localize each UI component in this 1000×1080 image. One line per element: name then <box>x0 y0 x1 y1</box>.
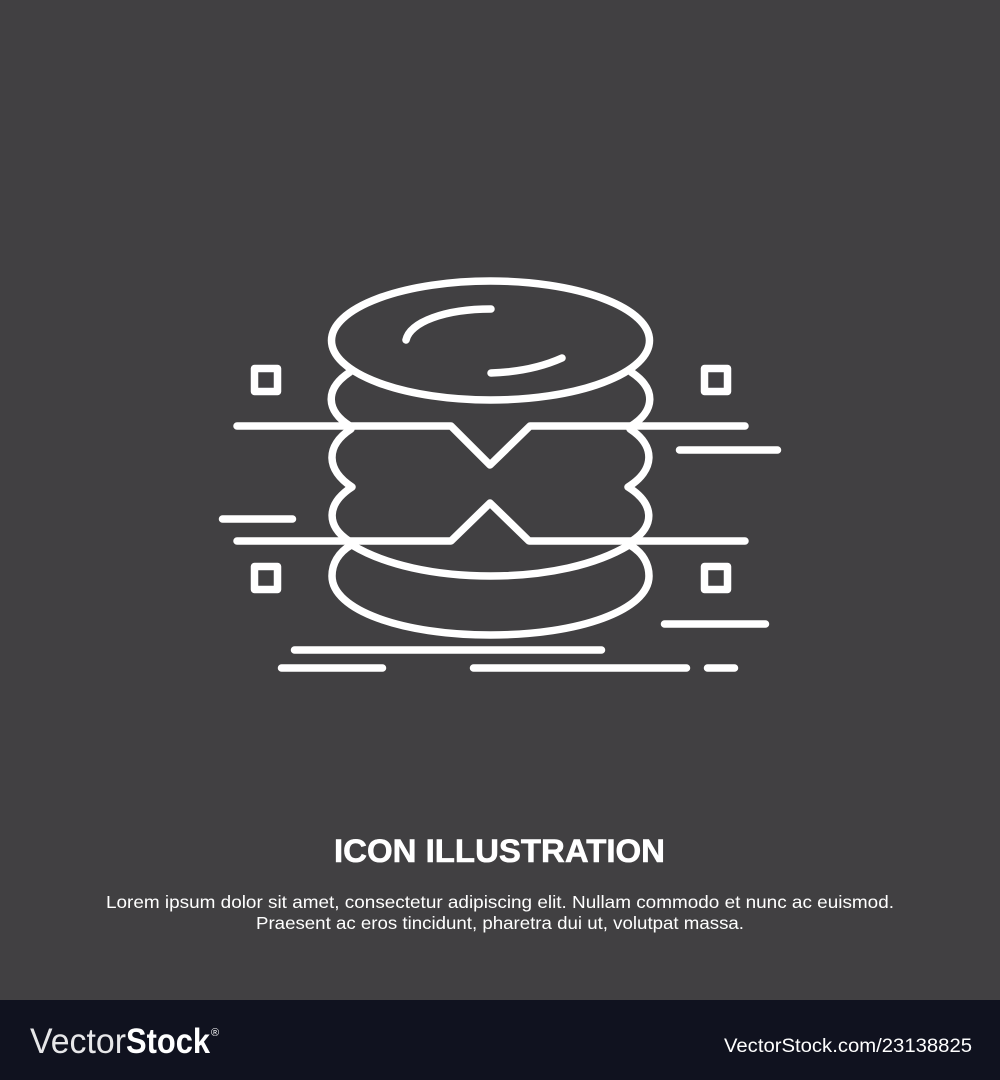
footer image id: VectorStock.com/23138825 <box>724 1036 972 1057</box>
lower strap line with chevron <box>237 503 745 541</box>
footer bar <box>0 1000 1000 1080</box>
logo registered mark: ® <box>211 1027 219 1039</box>
icon: database stack <box>222 281 778 668</box>
second disk side lobes <box>331 372 650 426</box>
disk highlights <box>406 309 562 373</box>
top disk ellipse <box>332 281 650 400</box>
footer logo <box>30 1022 219 1061</box>
upper strap line with chevron <box>237 426 745 465</box>
logo word: Vector: Vector <box>30 1022 126 1061</box>
description text <box>106 892 894 933</box>
speed lines <box>222 450 778 668</box>
accent square: upper right <box>704 368 728 392</box>
description line 1: Lorem ipsum dolor sit amet, consectetur adipiscing elit. Nullam commodo et nunc ac euismod. <box>106 892 894 912</box>
title: ICON ILLUSTRATION <box>334 833 665 869</box>
description line 2: Praesent ac eros tincidunt, pharetra dui ut, volutpat massa. <box>256 913 744 933</box>
middle disks outline with notches <box>332 429 649 541</box>
logo word: Stock: Stock <box>126 1022 210 1061</box>
lower disk front curve <box>352 545 629 576</box>
bottom disk outline <box>332 545 649 635</box>
accent square: lower right <box>704 566 728 590</box>
accent square: upper left <box>254 368 278 392</box>
accent square: lower left <box>254 566 278 590</box>
